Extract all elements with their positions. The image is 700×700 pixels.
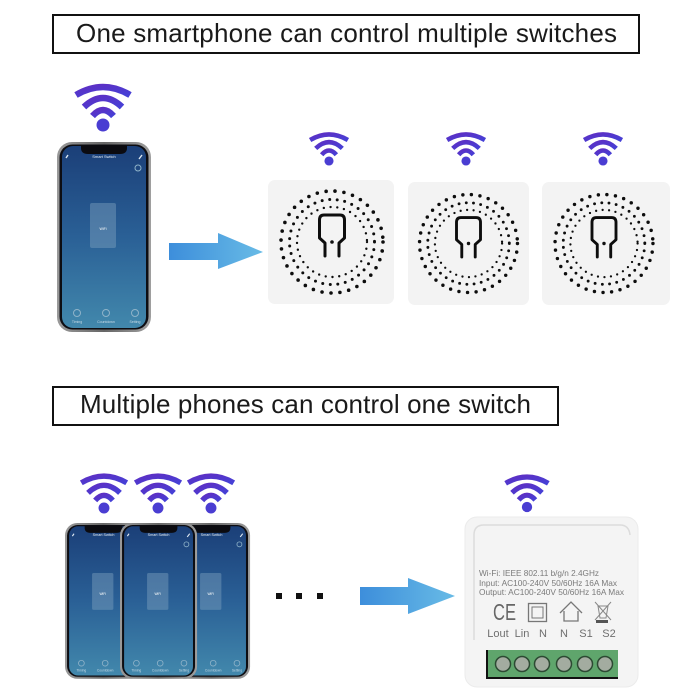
ellipsis dots: [276, 593, 323, 599]
wifi icons: three phones: [81, 476, 234, 513]
icon: crossed bin: [595, 602, 611, 623]
phone middle: Countdown: [152, 668, 169, 672]
phone: single smartphone: [57, 142, 151, 332]
phone: single smartphone: WiFi: [100, 227, 107, 231]
specification text: Wi-Fi: IEEE 802.11 b/g/n 2.4GHz: [479, 568, 599, 578]
wifi icon: main phone: [76, 87, 130, 132]
phone left: [65, 523, 142, 679]
phone right: Timing: [185, 668, 194, 672]
phone middle: WiFi: [154, 592, 161, 596]
phone left: Countdown: [97, 668, 114, 672]
switch 3: [542, 182, 670, 305]
phone: single smartphone: Timing: [72, 320, 82, 324]
phone middle: [120, 523, 197, 679]
terminal labels: N: [560, 628, 568, 640]
arrow: phones to switch: [360, 578, 455, 614]
icon: house: [560, 602, 582, 621]
specification text: Input: AC100-240V 50/60Hz 16A Max: [479, 578, 618, 588]
phone right: [173, 523, 250, 679]
heading: one smartphone many switches: One smartphone can control multiple switches: [76, 18, 617, 48]
phone middle: Setting: [179, 668, 189, 672]
switch 1: [268, 180, 394, 304]
icon: CE mark: CE: [493, 599, 516, 625]
phone middle: Smart Switch: [148, 533, 169, 537]
phone left: WiFi: [99, 592, 106, 596]
phone: single smartphone: Setting: [130, 320, 140, 324]
terminal labels: Lin: [515, 628, 529, 640]
terminal labels: S1: [579, 628, 593, 640]
wifi icon: switch 1: [310, 134, 348, 166]
icon: double insulation square: [528, 604, 546, 622]
phone left: Smart Switch: [93, 533, 114, 537]
terminal labels: S2: [602, 628, 616, 640]
heading: many phones one switch: Multiple phones can control one switch: [80, 389, 531, 419]
specification text: [479, 568, 625, 597]
specification text: Output: AC100-240V 50/60Hz 16A Max: [479, 587, 625, 597]
phone right: Countdown: [205, 668, 222, 672]
wifi icon: switch 2: [447, 134, 485, 166]
phone right: Smart Switch: [201, 533, 222, 537]
phone middle: Timing: [132, 668, 141, 672]
phones: group of three: [65, 523, 250, 679]
terminal block: [486, 650, 618, 679]
wifi icon: back of switch: [506, 477, 548, 512]
phone right: Setting: [232, 668, 242, 672]
arrow: phone to switches: [169, 233, 263, 269]
phone right: WiFi: [207, 592, 214, 596]
terminal labels: N: [539, 628, 547, 640]
terminal labels: Lout: [487, 628, 509, 640]
phone left: Timing: [77, 668, 86, 672]
phone: single smartphone: Countdown: [97, 320, 115, 324]
panel: switch back with specifications: [465, 517, 638, 687]
wifi icon: switch 3: [584, 134, 622, 166]
phone: single smartphone: Smart Switch: [92, 154, 116, 159]
panel: three smart switches: [268, 134, 670, 305]
switch 2: [408, 182, 529, 305]
terminal labels: [487, 628, 616, 640]
